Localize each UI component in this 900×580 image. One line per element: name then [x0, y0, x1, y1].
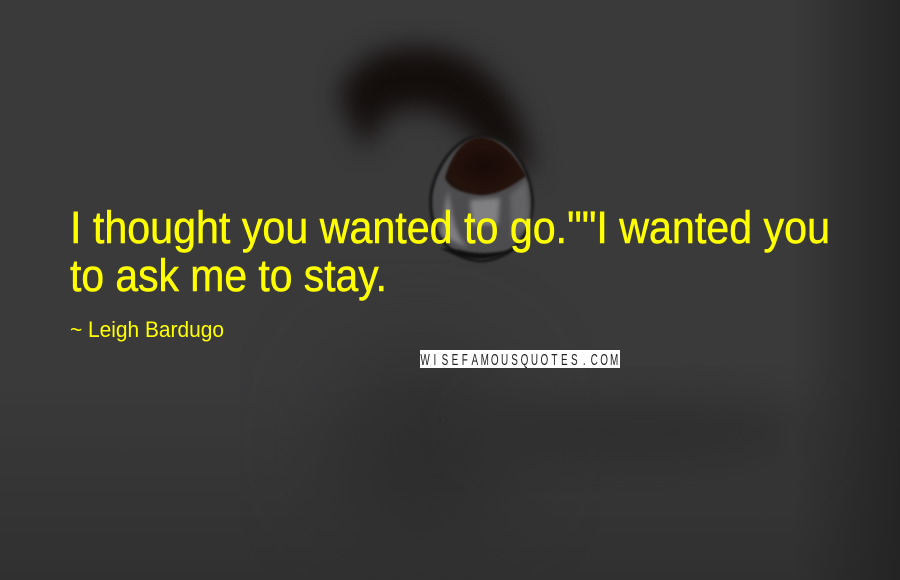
watermark badge: WISEFAMOUSQUOTES.COM: [420, 351, 618, 369]
water drop: [431, 136, 532, 261]
blurred dark branch above the water drop: [340, 47, 532, 175]
author attribution: ~ Leigh Bardugo: [70, 317, 224, 342]
quote text: to ask me to stay.: [70, 250, 387, 301]
quote text: I thought you wanted to go.""I wanted you: [70, 202, 830, 253]
quote text: [70, 202, 830, 301]
